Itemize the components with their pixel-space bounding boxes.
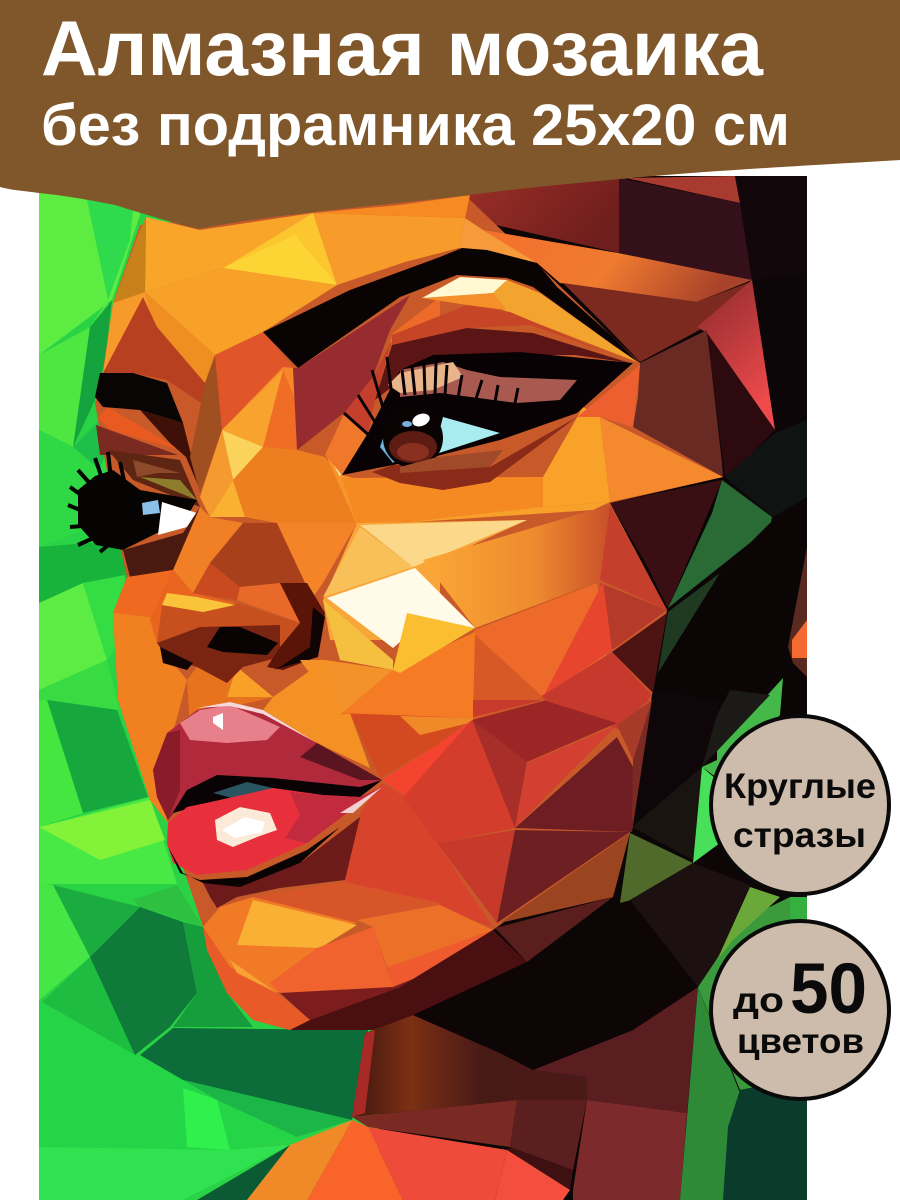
lower face facets — [203, 700, 652, 1030]
title: Алмазная мозаика — [41, 4, 764, 92]
right eyebrow and right eye — [263, 248, 638, 490]
badge: round rhinestones: Круглые — [724, 767, 876, 806]
badge: up to 50 colours: цветов — [737, 1022, 864, 1061]
badge: round rhinestones: стразы — [733, 816, 866, 855]
top brown banner — [0, 0, 900, 229]
mosaic picture: polygonal portrait of a woman — [39, 176, 810, 1200]
green background facets — [39, 176, 379, 1200]
badge: up to 50 colours: 50 — [790, 950, 867, 1029]
badge: up to 50 colours: до — [733, 981, 784, 1020]
cheek facets — [263, 365, 723, 797]
forehead facets — [103, 195, 775, 477]
badge: up to 50 colours — [711, 921, 889, 1099]
lips — [153, 702, 382, 908]
left eyebrow and left eye — [68, 373, 200, 577]
badge: round rhinestones — [711, 716, 889, 894]
subtitle: без подрамника 25х20 см — [41, 93, 790, 158]
dark hair and green facets on the right — [413, 176, 810, 1200]
face — [68, 195, 775, 1030]
neck and shoulder — [247, 987, 698, 1200]
nose — [113, 332, 357, 823]
